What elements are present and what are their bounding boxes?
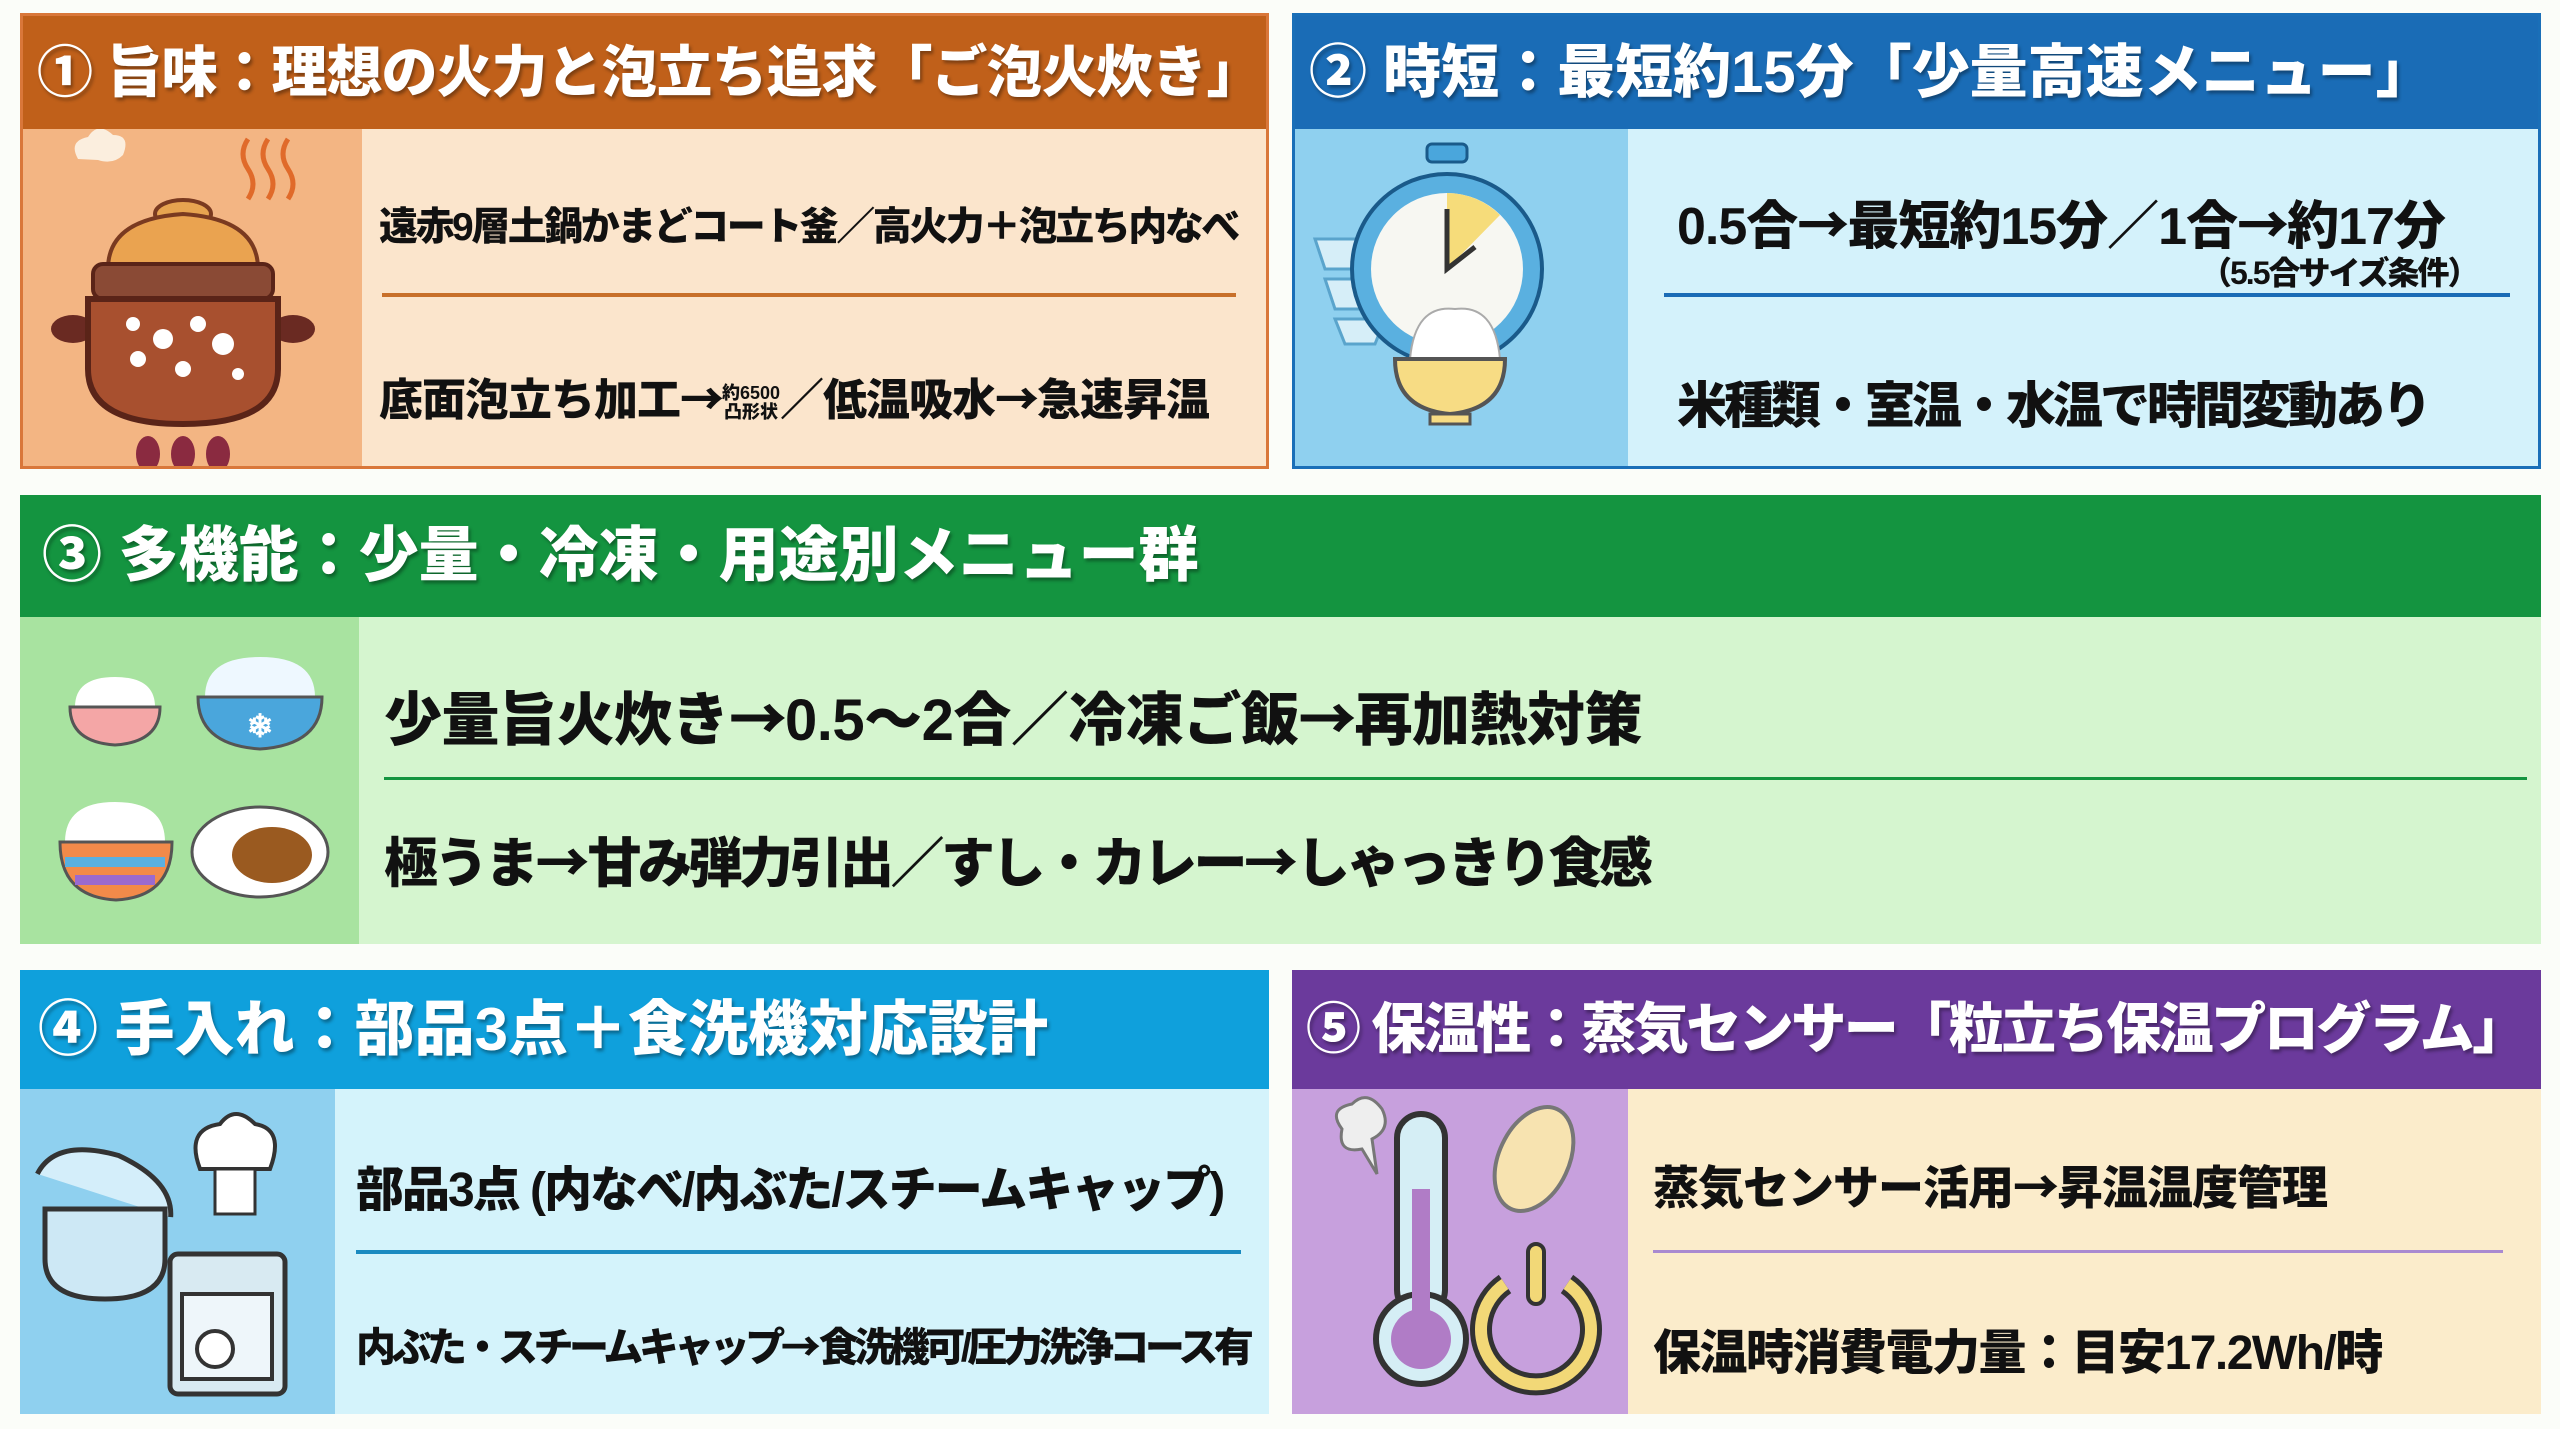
text: time line 2: 米種類・室温・水温で時間変動あり bbox=[1677, 378, 2429, 434]
panel: umami bbox=[20, 13, 1269, 469]
icon: donabe pot bbox=[23, 129, 362, 466]
icon: rice bowls: ❄ bbox=[247, 708, 273, 744]
text: umami line 1: 遠赤9層土鍋かまどコート釜／高火力＋泡立ち内なべ bbox=[379, 206, 1238, 249]
text: umami line 2: 約6500 bbox=[722, 383, 780, 403]
header: multifunction: ③ 多機能：少量・冷凍・用途別メニュー群 bbox=[42, 522, 1199, 589]
header: time saving: ② 時短：最短約15分「少量高速メニュー」 bbox=[1309, 40, 2434, 105]
header: multifunction bbox=[20, 495, 2541, 617]
header: keep warm: ⑤ 保温性：蒸気センサー「粒立ち保温プログラム」 bbox=[1306, 998, 2525, 1060]
panel: multifunction bbox=[20, 495, 2541, 944]
text: warm line 1: 蒸気センサー活用→昇温温度管理 bbox=[1653, 1152, 2327, 1218]
header: umami bbox=[23, 16, 1266, 129]
icon: pot, cap, dishwasher bbox=[20, 1089, 335, 1414]
header: umami: ① 旨味：理想の火力と泡立ち追求「ご泡火炊き」 bbox=[37, 41, 1262, 104]
text: multi line 1: 少量旨火炊き→0.5～2合／冷凍ご飯→再加熱対策 bbox=[384, 673, 1642, 757]
text: time note: （5.5合サイズ条件） bbox=[2200, 255, 2478, 291]
panel: time saving bbox=[1292, 13, 2541, 469]
text: warm line 2: 保温時消費電力量：目安17.2Wh/時 bbox=[1653, 1327, 2382, 1380]
icon: rice bowls bbox=[20, 617, 359, 944]
header: time saving bbox=[1295, 16, 2538, 129]
text: umami line 2: 底面泡立ち加工→ ／低温吸水→急速昇温 bbox=[379, 364, 1209, 428]
header: keep warm bbox=[1292, 970, 2541, 1089]
text: time line 1: 0.5合→最短約15分／1合→約17分 bbox=[1677, 184, 2445, 259]
header: maintenance: ④ 手入れ：部品3点＋食洗機対応設計 bbox=[38, 996, 1048, 1063]
text: maint line 1: 部品3点 (内なべ/内ぶた/スチームキャップ) bbox=[356, 1164, 1223, 1217]
icon: stopwatch with rice bbox=[1295, 129, 1628, 466]
panel: keep warm bbox=[1292, 970, 2541, 1414]
text: maint line 2: 内ぶた・スチームキャップ→食洗機可/圧力洗浄コース有 bbox=[356, 1315, 1249, 1373]
icon: thermometer, rice grain, power bbox=[1292, 1089, 1628, 1414]
text: multi line 2: 極うま→甘み弾力引出／すし・カレー→しゃっきり食感 bbox=[384, 819, 1650, 898]
header: maintenance bbox=[20, 970, 1269, 1089]
panel: maintenance bbox=[20, 970, 1269, 1414]
text: umami line 2: 凸形状 bbox=[724, 402, 778, 422]
